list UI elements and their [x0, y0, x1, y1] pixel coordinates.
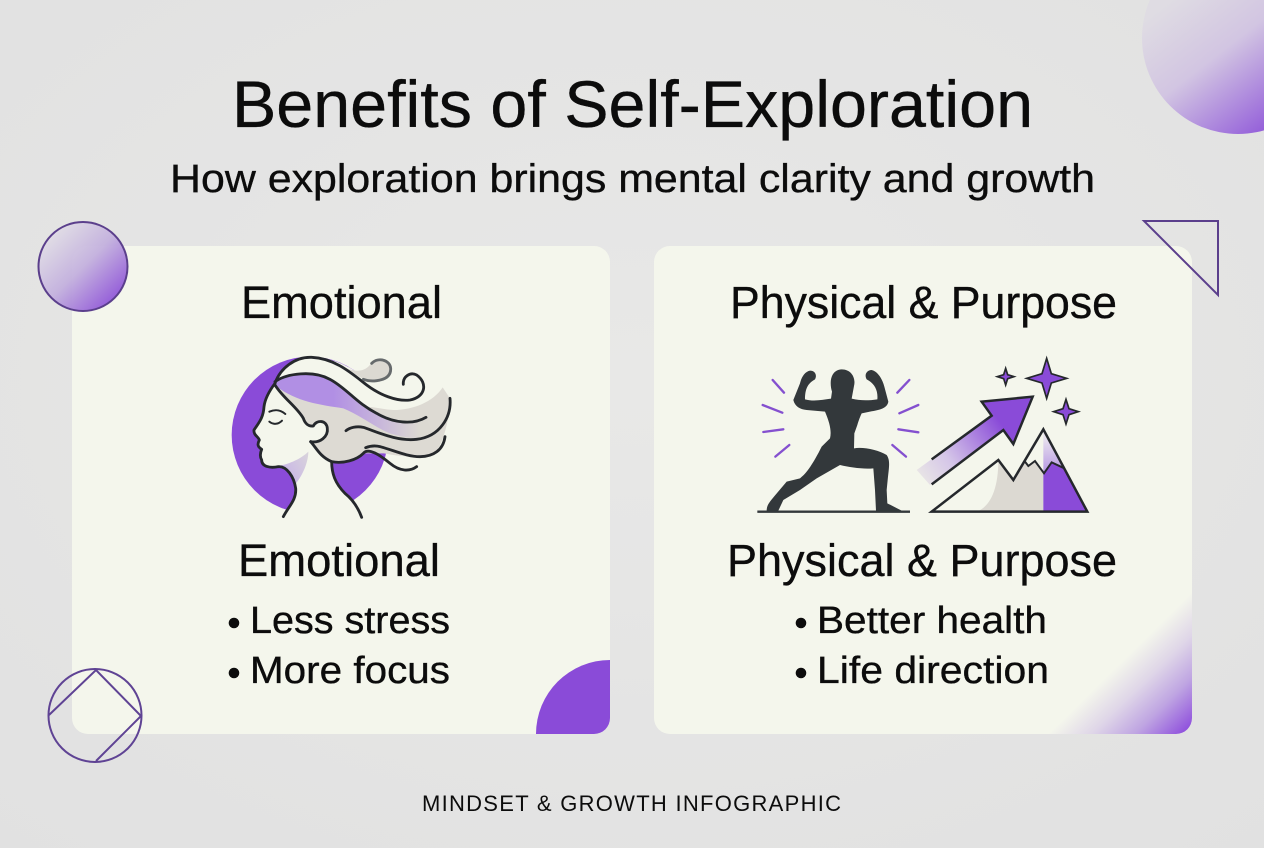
subheading: emotional: Emotional — [238, 535, 440, 586]
arrow — [917, 397, 1033, 485]
corner accent: purple gradient — [1060, 604, 1192, 734]
bullet list: physical and purpose — [796, 600, 1049, 692]
subtitle: How exploration brings mental clarity and growth — [170, 157, 1095, 201]
stars — [997, 358, 1078, 424]
bullet list: emotional: Less stress — [250, 600, 450, 642]
icon: strong figure — [757, 369, 918, 512]
decorative triangle outline — [1144, 221, 1218, 295]
decorative circle with diamond lines — [48, 669, 142, 762]
subheading: physical and purpose: Physical & Purpose — [727, 535, 1117, 586]
decorative circle: top left — [38, 222, 128, 311]
heading: emotional: Emotional — [241, 277, 442, 328]
icon: rising arrow, mountain and stars — [917, 358, 1087, 512]
bullet list: physical and purpose: Better health — [817, 600, 1047, 642]
mountain — [932, 429, 1087, 512]
corner accent: purple quarter circle — [536, 660, 610, 734]
heading: physical and purpose: Physical & Purpose — [730, 277, 1117, 328]
panel: emotional — [72, 246, 610, 734]
icon: woman profile with flowing hair — [232, 357, 450, 518]
bullet list: emotional: More focus — [250, 650, 450, 692]
footer: MINDSET & GROWTH INFOGRAPHIC — [422, 791, 841, 816]
bullet list: emotional — [229, 600, 450, 692]
decorative circle: top right — [1142, 0, 1264, 134]
bullet list: physical and purpose: Life direction — [817, 650, 1049, 692]
title: Benefits of Self-Exploration — [232, 67, 1033, 141]
panel: physical and purpose — [654, 246, 1192, 734]
